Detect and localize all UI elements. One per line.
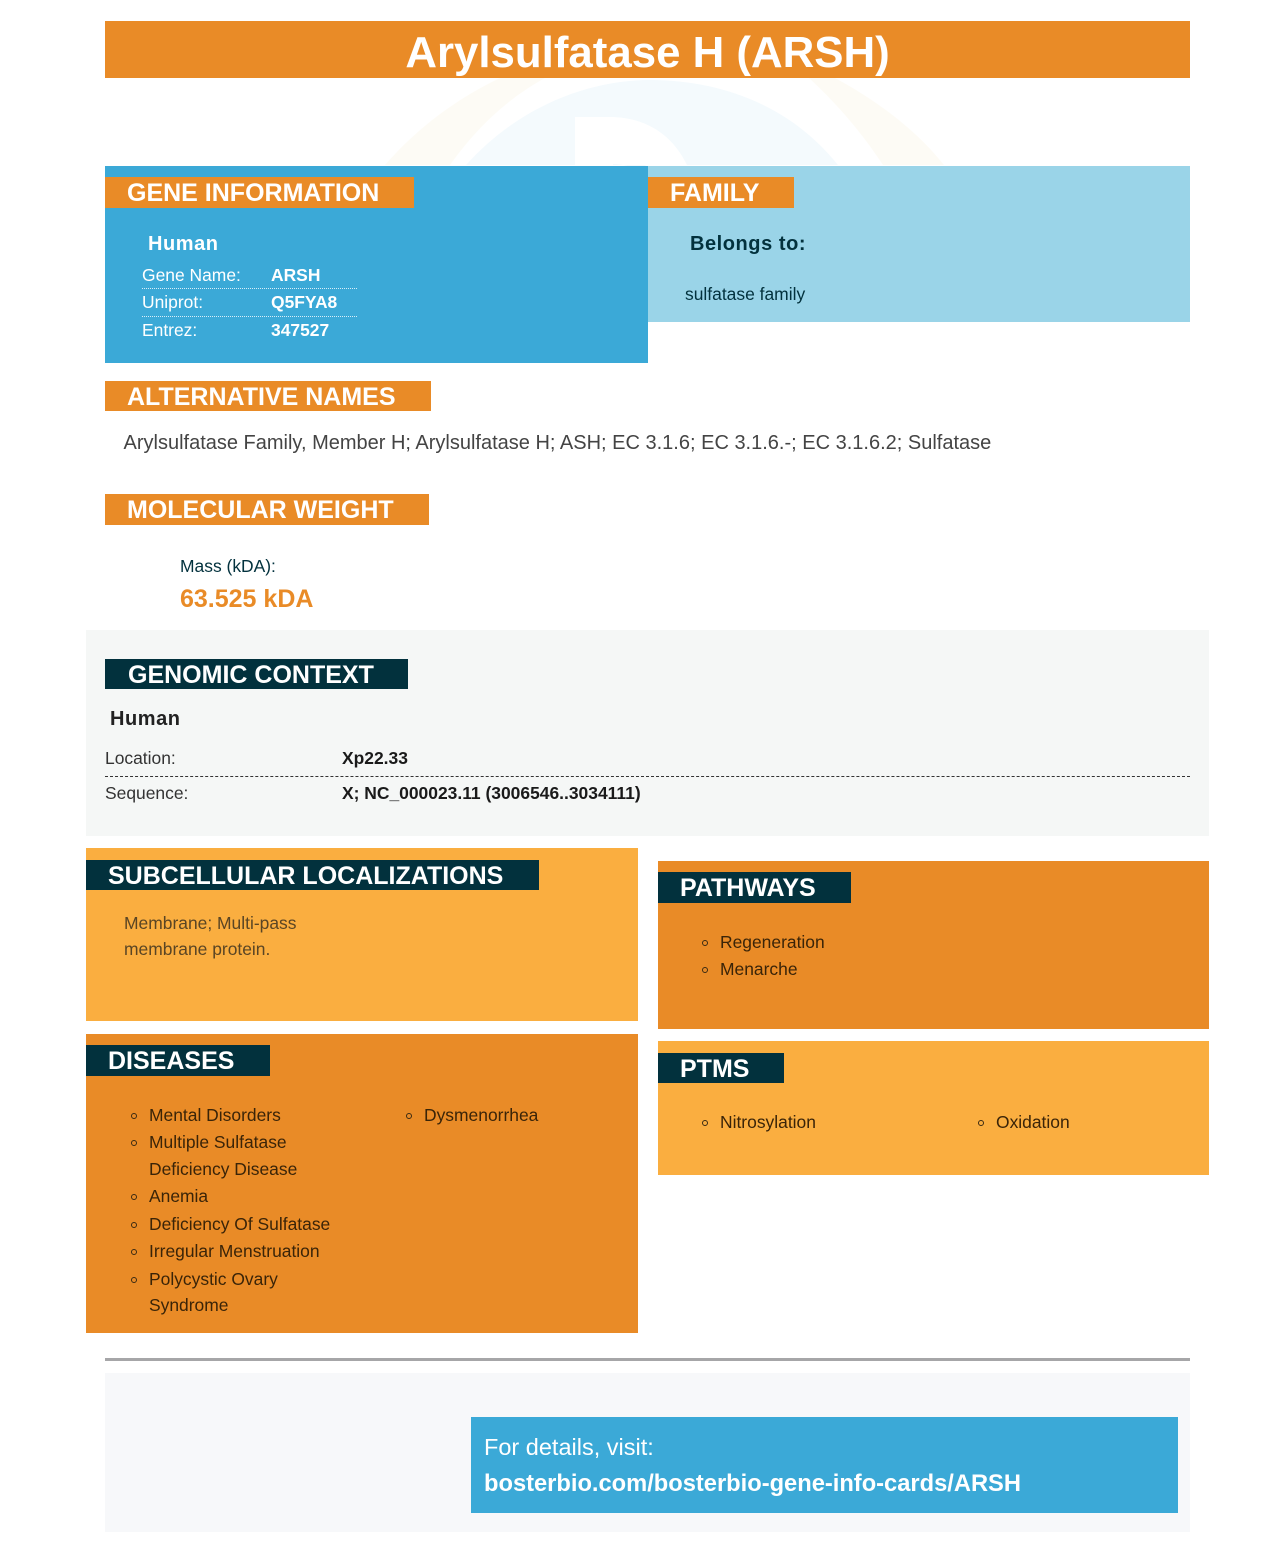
gene info rows: Entrez: bbox=[142, 320, 197, 340]
panel: subcellular localizations bbox=[86, 848, 638, 1021]
panel: pathways bbox=[658, 861, 1209, 1029]
alternative names text: Arylsulfatase Family, Member H; Arylsulfatase H; ASH; EC 3.1.6; EC 3.1.6.-; EC 3.1.6.2; Sulfatase bbox=[124, 432, 991, 454]
heading: diseases: DISEASES bbox=[108, 1047, 234, 1075]
gene info rows: 347527 bbox=[271, 320, 329, 340]
panel: footer bbox=[105, 1373, 1190, 1532]
localization text bbox=[124, 913, 296, 959]
pathway list bbox=[702, 932, 825, 979]
disease list column 1: Deficiency Of Sulfatase bbox=[149, 1214, 330, 1234]
heading: pathways: PATHWAYS bbox=[680, 874, 816, 902]
title banner: Arylsulfatase H (ARSH) bbox=[405, 28, 890, 77]
gene info rows: ARSH bbox=[271, 265, 320, 285]
pathway list: Menarche bbox=[720, 959, 798, 979]
gene info rows: Gene Name: bbox=[142, 265, 241, 285]
localization text: membrane protein. bbox=[124, 939, 270, 959]
gene info rows: Q5FYA8 bbox=[271, 292, 337, 312]
location row: Xp22.33 bbox=[342, 748, 408, 768]
heading: genomic context: GENOMIC CONTEXT bbox=[128, 661, 374, 689]
heading: gene information: GENE INFORMATION bbox=[127, 179, 379, 207]
panel: family bbox=[648, 166, 1190, 322]
heading: family bbox=[648, 177, 794, 208]
species label: Human bbox=[110, 708, 181, 730]
belongs to label: Belongs to: bbox=[690, 233, 806, 255]
family value: sulfatase family bbox=[685, 284, 805, 304]
disease list column 1: Multiple Sulfatase bbox=[149, 1132, 287, 1152]
location row bbox=[105, 748, 408, 768]
heading: ptms bbox=[658, 1053, 784, 1083]
disease list column 1: Deficiency Disease bbox=[149, 1159, 297, 1179]
sequence row: Sequence: bbox=[105, 783, 188, 803]
title banner bbox=[105, 21, 1190, 78]
disease list column 1: Polycystic Ovary bbox=[149, 1269, 278, 1289]
callout: details link: For details, visit: bbox=[484, 1434, 654, 1460]
heading: family: FAMILY bbox=[670, 179, 759, 207]
ptm item: nitrosylation: Nitrosylation bbox=[720, 1112, 816, 1132]
localization text: Membrane; Multi-pass bbox=[124, 913, 296, 933]
mass value: 63.525 kDA bbox=[180, 585, 313, 613]
species label: Human bbox=[148, 233, 219, 255]
heading: alternative names: ALTERNATIVE NAMES bbox=[127, 383, 396, 411]
disease list column 2: Dysmenorrhea bbox=[424, 1105, 538, 1125]
heading: pathways bbox=[658, 872, 851, 903]
sequence row bbox=[105, 783, 641, 803]
disease list column 1: Syndrome bbox=[149, 1295, 228, 1315]
background logo watermark bbox=[386, 78, 944, 166]
disease list column 1: Mental Disorders bbox=[149, 1105, 281, 1125]
location row: Location: bbox=[105, 748, 176, 768]
pathway list: Regeneration bbox=[720, 932, 825, 952]
callout: details link: bosterbio.com/bosterbio-gene-info-cards/ARSH bbox=[484, 1471, 1021, 1497]
gene info rows bbox=[142, 265, 357, 340]
panel: diseases bbox=[86, 1034, 638, 1333]
panel: ptms bbox=[658, 1041, 1209, 1175]
callout: details link bbox=[471, 1417, 1178, 1513]
heading: diseases bbox=[86, 1045, 270, 1076]
heading: ptms: PTMS bbox=[680, 1055, 749, 1083]
heading: subcellular localizations: SUBCELLULAR LOCALIZATIONS bbox=[108, 862, 503, 890]
ptm item: oxidation: Oxidation bbox=[996, 1112, 1070, 1132]
disease list column 1: Anemia bbox=[149, 1186, 208, 1206]
heading: molecular weight: MOLECULAR WEIGHT bbox=[127, 496, 394, 524]
panel: gene information bbox=[105, 166, 648, 363]
panel: genomic context bbox=[86, 630, 1209, 836]
mass label: Mass (kDA): bbox=[180, 556, 276, 576]
sequence row: X; NC_000023.11 (3006546..3034111) bbox=[342, 783, 641, 803]
gene info rows: Uniprot: bbox=[142, 292, 203, 312]
disease list column 1 bbox=[131, 1105, 330, 1315]
disease list column 1: Irregular Menstruation bbox=[149, 1241, 320, 1261]
